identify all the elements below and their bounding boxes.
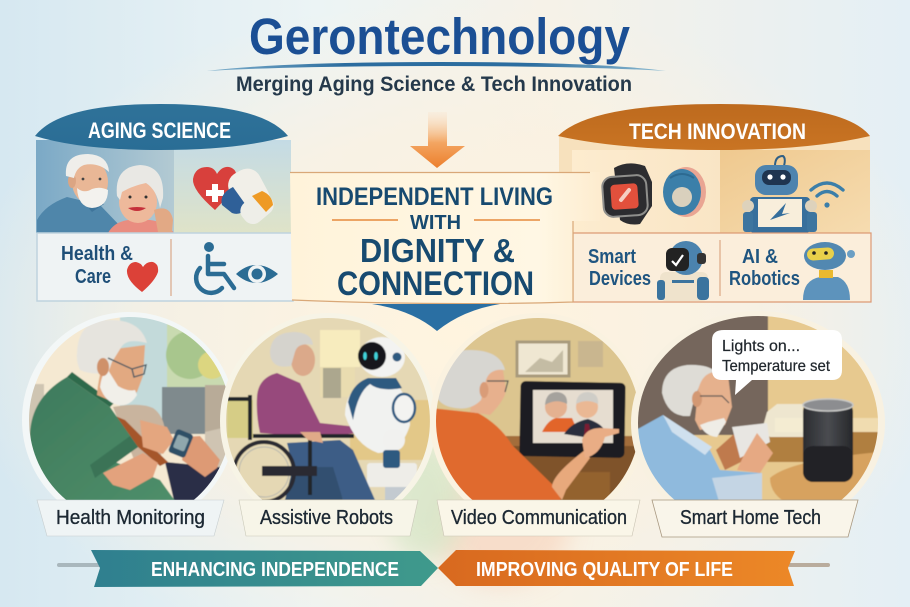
scene xyxy=(436,318,636,500)
panel: central message xyxy=(290,172,600,304)
caption: health monitoring: Health Monitoring xyxy=(56,507,205,529)
lower tile box xyxy=(573,233,871,302)
banner tail: left xyxy=(59,563,130,567)
circle frame xyxy=(430,313,646,529)
caption: smart home tech xyxy=(652,500,858,537)
speech bubble xyxy=(712,330,842,395)
text: connection: CONNECTION xyxy=(337,265,534,303)
photo: assistive robots xyxy=(220,318,433,500)
image tile: heart and pills xyxy=(174,140,291,233)
photo: health monitoring xyxy=(22,312,228,500)
arrow: down to center xyxy=(410,112,465,168)
photo: video communication xyxy=(433,318,636,500)
banner: enhancing independence: ENHANCING INDEPENDENCE xyxy=(151,559,399,581)
label: health & care: Health & xyxy=(61,243,133,265)
text: independent living: INDEPENDENT LIVING xyxy=(316,183,553,211)
lower tile box xyxy=(37,233,293,301)
divider xyxy=(719,240,721,296)
divider xyxy=(170,239,172,296)
icon: wifi xyxy=(811,183,843,208)
image tile: older couple xyxy=(36,140,174,233)
text: dignity &: DIGNITY & xyxy=(360,232,515,269)
heading text: AGING SCIENCE xyxy=(88,118,231,143)
subtitle: Merging Aging Science & Tech Innovation xyxy=(236,73,632,96)
caption: health monitoring xyxy=(37,500,224,536)
label: ai & robotics: AI & xyxy=(742,246,778,268)
circle frame xyxy=(631,311,885,535)
heading band: aging science xyxy=(35,104,288,150)
panel: tech innovation xyxy=(558,104,871,302)
label: health & care: Care xyxy=(75,266,111,288)
icon: wheelchair xyxy=(196,242,234,293)
circle frame xyxy=(220,313,436,529)
icon: yellow-faced robot xyxy=(803,242,855,300)
label: smart devices: Smart xyxy=(588,246,636,268)
title: Gerontechnology xyxy=(249,8,631,65)
image tile: smart devices xyxy=(572,150,720,233)
accent line xyxy=(332,219,540,221)
icon: heart xyxy=(127,262,158,292)
pointer: blue wedge xyxy=(372,304,500,331)
label: smart devices: Devices xyxy=(589,268,651,290)
icon: eye xyxy=(236,265,278,283)
caption: assistive robots xyxy=(239,500,418,536)
image tile: robot xyxy=(720,150,870,233)
label: ai & robotics: Robotics xyxy=(729,268,800,290)
circle frame xyxy=(22,312,236,528)
title swoosh xyxy=(207,62,666,71)
scene xyxy=(226,318,430,500)
caption: video communication xyxy=(437,500,640,536)
speech bubble: Lights on... xyxy=(722,338,800,355)
caption: assistive robots: Assistive Robots xyxy=(260,507,393,529)
heading text: TECH INNOVATION xyxy=(629,119,806,144)
scene xyxy=(638,316,878,500)
icon: small robot xyxy=(657,241,709,301)
center box xyxy=(290,172,600,304)
text: with: WITH xyxy=(410,212,461,234)
banner tail: right xyxy=(790,563,828,567)
banner: enhancing independence xyxy=(91,550,438,587)
caption: smart home tech: Smart Home Tech xyxy=(680,507,821,529)
banner: improving quality of life xyxy=(438,550,795,586)
scene xyxy=(29,317,226,500)
panel body xyxy=(559,136,870,233)
photo: smart home tech xyxy=(631,316,885,500)
panel: aging science xyxy=(35,104,293,301)
speech bubble: Temperature set xyxy=(722,358,831,375)
heading band: tech innovation xyxy=(558,104,870,150)
banner: improving quality of life: IMPROVING QUALITY OF LIFE xyxy=(476,559,733,581)
caption: video communication: Video Communication xyxy=(451,507,627,529)
